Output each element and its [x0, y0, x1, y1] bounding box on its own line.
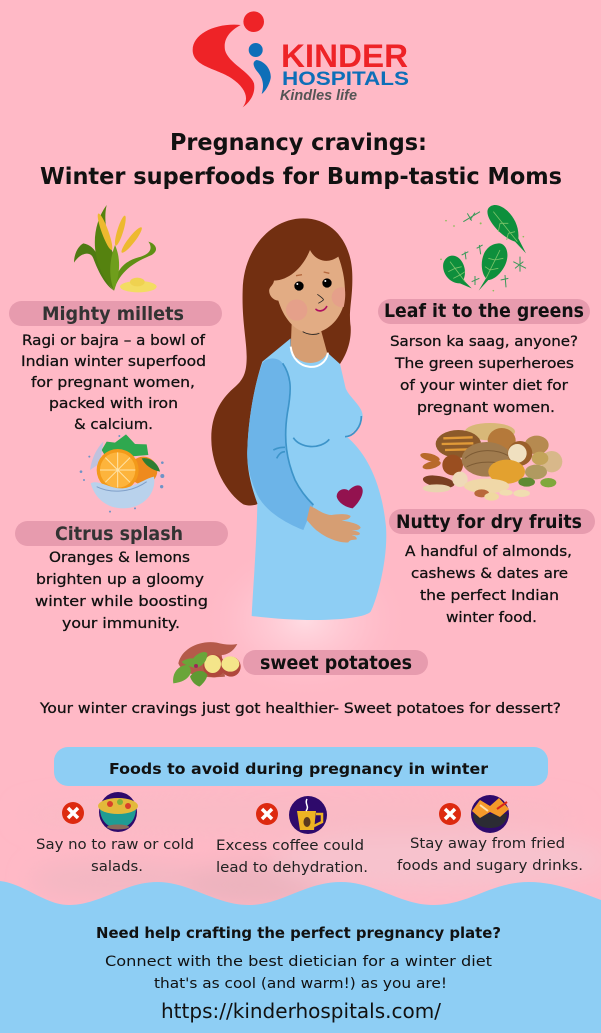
text: fried foods warning: Stay away from fried [410, 836, 565, 852]
text: citrus description [35, 550, 208, 632]
text: fried foods warning: foods and sugary drinks. [397, 858, 583, 874]
call to action [96, 924, 501, 1023]
illustration: pregnant woman [211, 218, 386, 620]
banner: foods to avoid [54, 747, 548, 786]
heading: mighty millets: Mighty millets [42, 303, 184, 325]
text: greens description: Sarson ka saag, anyone? [390, 334, 578, 350]
call to action: that's as cool (and warm!) as you are! [154, 976, 447, 992]
text: dry fruits description: winter food. [446, 610, 537, 626]
text: millets description: Ragi or bajra – a bowl of [22, 333, 206, 349]
text: millets description: Indian winter superfood [21, 354, 206, 370]
icon: spinach leaves [440, 205, 526, 291]
text: coffee warning: lead to dehydration. [216, 860, 368, 876]
logo: Kinder Hospitals: KINDER [281, 38, 408, 74]
text: salads warning [36, 837, 194, 875]
text: coffee warning [216, 838, 368, 876]
call to action: Connect with the best dietician for a winter diet [105, 954, 492, 970]
logo: Kinder Hospitals: HOSPITALS [282, 69, 409, 90]
panel: sweet potatoes [39, 642, 561, 717]
text: millets description: for pregnant women, [31, 375, 195, 391]
panel: citrus splash [15, 434, 228, 632]
icon: fried food bowl [471, 795, 509, 833]
text: sweet potatoes description: Your winter cravings just got healthier- Sweet potatoes for dessert? [39, 701, 561, 717]
heading: citrus splash: Citrus splash [55, 523, 183, 545]
call to action: https://kinderhospitals.com/ [161, 999, 441, 1023]
text: citrus description: brighten up a gloomy [36, 572, 204, 588]
banner: foods to avoid: Foods to avoid during pregnancy in winter [109, 760, 488, 778]
heading: citrus splash [15, 521, 228, 546]
title [40, 130, 562, 190]
panel: mighty millets [9, 205, 222, 433]
icon: cross [256, 803, 278, 825]
heading: leaf it to the greens: Leaf it to the greens [384, 300, 584, 322]
call to action: Need help crafting the perfect pregnancy plate? [96, 924, 501, 942]
logo: Kinder Hospitals [193, 11, 409, 107]
text: citrus description: Oranges & lemons [49, 550, 190, 566]
heading: nutty for dry fruits: Nutty for dry fruits [396, 511, 582, 533]
icon: millet plant [74, 205, 157, 292]
logo: Kinder Hospitals: Kindles life [280, 87, 357, 104]
text: dry fruits description: A handful of almonds, [405, 544, 572, 560]
item: avoid raw salads [36, 792, 194, 875]
icon: orange splash [80, 434, 164, 513]
panel: dry fruits [389, 423, 595, 626]
icon: cross [62, 802, 84, 824]
text: salads warning: Say no to raw or cold [36, 837, 194, 853]
text: citrus description: your immunity. [62, 616, 180, 632]
text: greens description: pregnant women. [417, 400, 555, 416]
item: avoid fried foods [397, 795, 583, 874]
icon: salad bowl [98, 792, 138, 832]
item: avoid excess coffee [216, 796, 368, 876]
title: Pregnancy cravings: [170, 130, 427, 156]
text: dry fruits description: cashews & dates are [411, 566, 568, 582]
panel: leafy greens [378, 205, 590, 416]
text: salads warning: salads. [91, 859, 143, 875]
text: greens description [390, 334, 578, 416]
text: fried foods warning [397, 836, 583, 874]
text: millets description [21, 333, 206, 433]
icon: nuts pile [419, 423, 562, 501]
icon: coffee cup [289, 796, 327, 834]
text: citrus description: winter while boosting [35, 594, 208, 610]
heading: sweet potatoes: sweet potatoes [260, 652, 412, 674]
heading: mighty millets [9, 301, 222, 326]
icon: sweet potato [173, 642, 241, 687]
text: millets description: packed with iron [49, 396, 178, 412]
footer: blue wave [0, 881, 601, 1033]
text: millets description: & calcium. [74, 417, 153, 433]
text: coffee warning: Excess coffee could [216, 838, 364, 854]
icon: cross [439, 803, 461, 825]
title: Winter superfoods for Bump-tastic Moms [40, 164, 562, 190]
text: dry fruits description: the perfect Indian [420, 588, 559, 604]
text: greens description: of your winter diet for [400, 378, 568, 394]
text: greens description: The green superheroes [394, 356, 574, 372]
text: dry fruits description [405, 544, 572, 626]
